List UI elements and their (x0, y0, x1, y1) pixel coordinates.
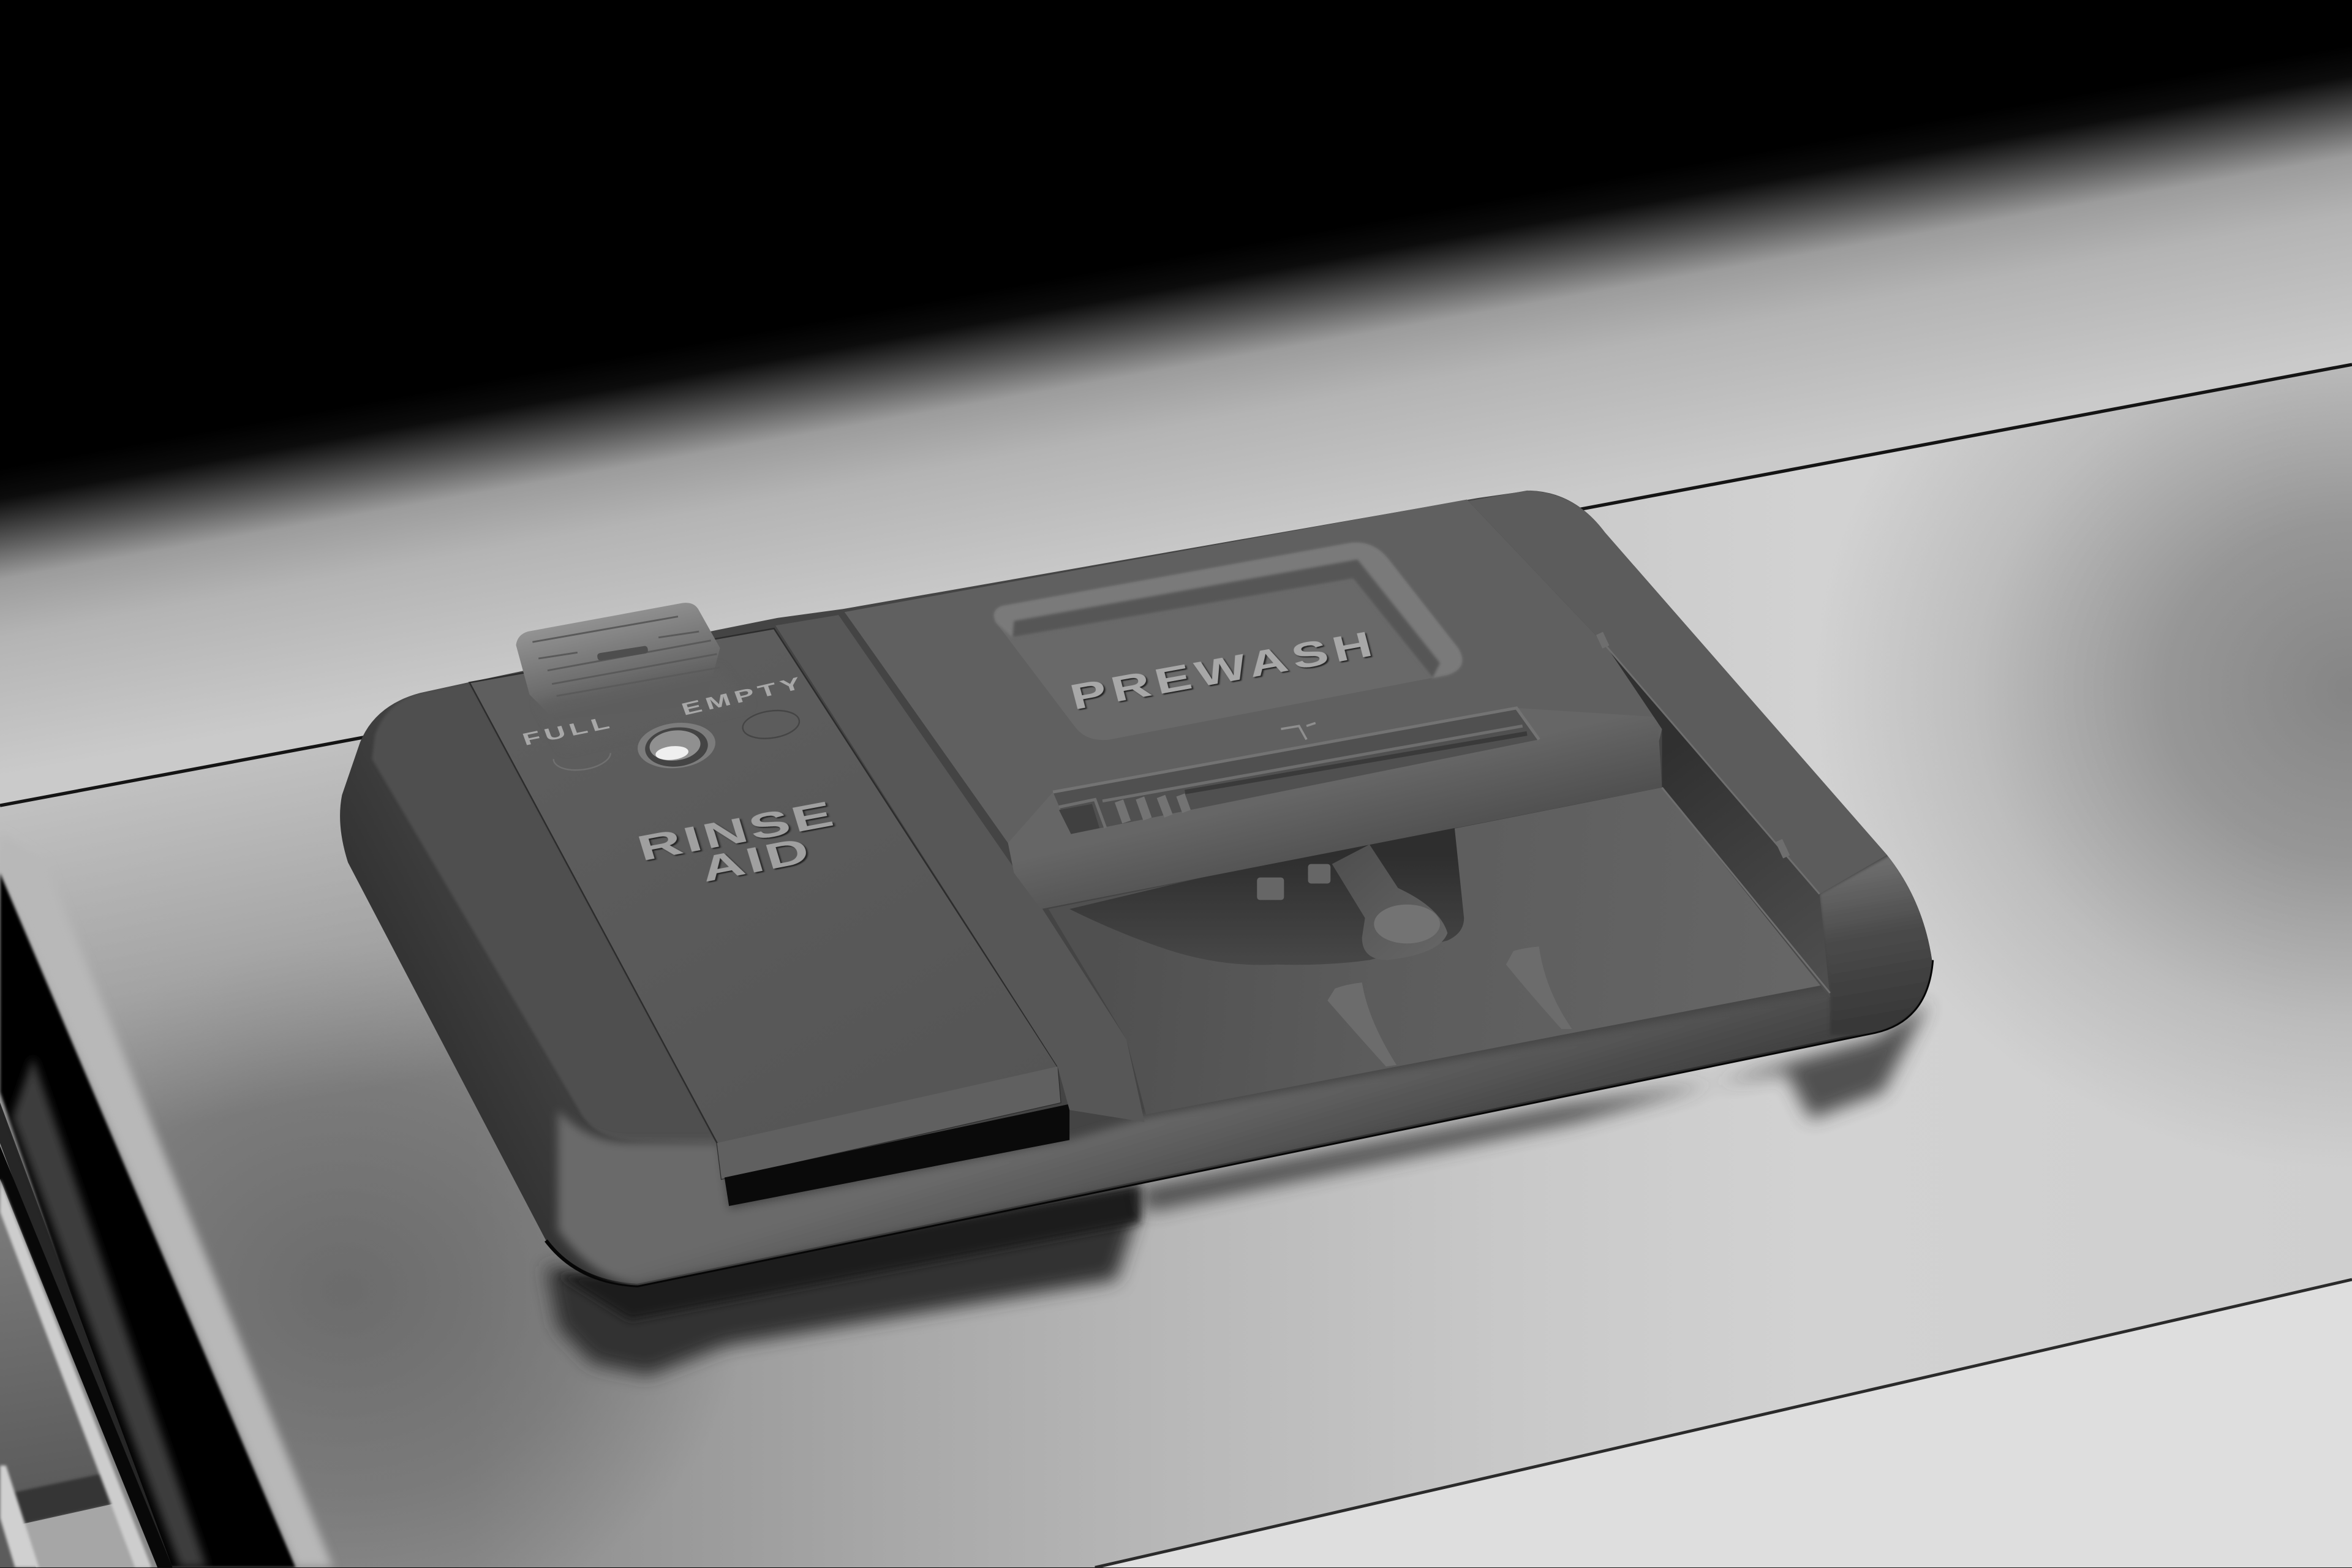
prewash recess (994, 543, 1462, 740)
dispenser shadow on panel (546, 1185, 1140, 1376)
dispenser assembly (340, 491, 1935, 1286)
label: RINSE: RINSE (633, 793, 841, 869)
lower door panel surface (0, 364, 2352, 1567)
label: FULL: FULL (519, 712, 616, 749)
small block right (1308, 864, 1330, 883)
prewash cover (845, 500, 1662, 909)
lever (1332, 845, 1447, 960)
panel seam line (0, 364, 2352, 805)
small block left (1257, 878, 1284, 900)
T alignment mark (1281, 723, 1316, 739)
latch comb teeth (1119, 795, 1186, 822)
indicator circle full (554, 753, 611, 770)
rinse aid lid (470, 628, 1060, 1179)
retaining tooth left (1327, 982, 1396, 1066)
indicator circle empty (741, 707, 801, 742)
lower left recessed area (0, 1179, 111, 1568)
level indicator lens (635, 719, 718, 772)
latch slot (1053, 708, 1539, 834)
left light trim (0, 1466, 39, 1567)
light trim strip (0, 1179, 151, 1567)
recessed lit floor (23, 1503, 150, 1567)
right rail (1469, 491, 1887, 998)
rail inner wall (1607, 647, 1830, 998)
tab blend into lid (537, 668, 750, 750)
lid tab (516, 603, 720, 720)
label: AID: AID (696, 830, 817, 890)
divider strip between compartments (775, 615, 1145, 1122)
left edge bright bevel (29, 917, 334, 1568)
rinse aid panel (470, 603, 1069, 1206)
rinse aid dark slot (725, 1104, 1069, 1206)
cover front face (1008, 708, 1662, 909)
lid lower lip (717, 1066, 1060, 1179)
dispenser outer body (340, 491, 1932, 1286)
front skirt bevel (558, 960, 1928, 1286)
left skirt top strip (372, 682, 717, 1143)
upper countertop surface with blurred horizon (0, 0, 2352, 805)
rail lit lip (1607, 647, 1830, 993)
label: EMPTY: EMPTY (679, 673, 808, 719)
recessed dark bar (13, 1473, 117, 1524)
rail clip lower (1776, 839, 1790, 859)
retaining tooth right (1506, 946, 1572, 1029)
open tray floor (1049, 788, 1828, 1115)
left edge black band (0, 873, 295, 1567)
right rear corner bevel (1820, 855, 1935, 1035)
dark round well (1069, 818, 1464, 965)
rail top (1469, 491, 1887, 894)
body shading (372, 682, 1935, 1286)
label: PREWASH: PREWASH (1066, 623, 1382, 717)
rail clip top (1596, 632, 1609, 649)
lower bright strip (1095, 1280, 2352, 1567)
body bottom edge (546, 960, 1932, 1286)
cover top face (845, 500, 1662, 855)
